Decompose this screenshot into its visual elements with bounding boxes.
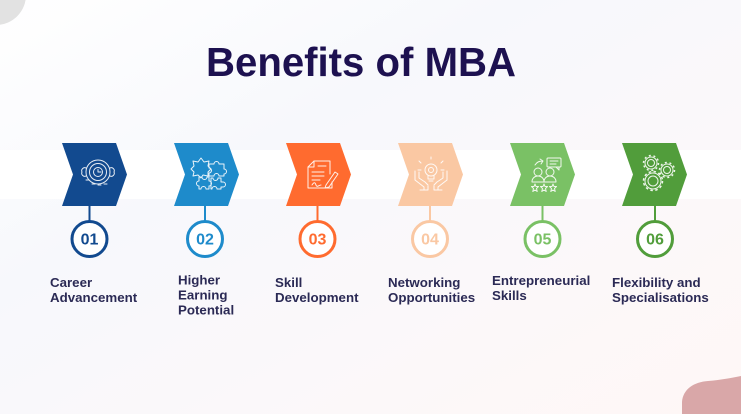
step 5: Entrepreneurial Skills [492,143,590,303]
number badge 06 [638,222,672,256]
number badge 04: 04 [421,232,439,248]
connector 4 [429,206,431,222]
label: Flexibility and Specialisations: Specialisations [612,290,709,305]
icon: headset with clock [82,160,114,185]
chevron 2 [174,143,239,206]
connector 3 [316,206,318,222]
label: Career Advancement: Advancement [50,290,138,305]
label: Career Advancement: Career [50,275,92,290]
label: Entrepreneurial Skills: Skills [492,288,527,303]
decorative corner shape: bottom right [682,376,741,414]
icon: three gears [644,156,674,190]
icon: document and pencil [308,161,338,188]
step 6: Flexibility and Specialisations [612,143,709,305]
step 4: Networking Opportunities [388,143,475,305]
step 1: Career Advancement [50,143,138,305]
connector 6 [654,206,656,222]
number badge 02 [188,222,222,256]
label: Higher Earning Potential: Potential [178,302,234,318]
icon: hands holding light bulb [415,157,447,190]
label: Skill Development: Skill [275,275,302,290]
connector 2 [204,206,206,222]
chevron 6 [622,143,687,206]
number badge 06: 06 [646,232,664,248]
label: Flexibility and Specialisations: Flexibility and [612,275,701,290]
chevron 5 [510,143,575,206]
number badge 03: 03 [309,232,326,248]
number badge 05: 05 [534,232,552,248]
step 2: Higher Earning Potential [174,143,239,318]
icon: puzzle pieces [191,158,226,189]
connector 5 [542,206,544,222]
step 3: Skill Development [275,143,359,305]
label: Higher Earning Potential: Earning [178,288,228,302]
number badge 01: 01 [81,232,98,248]
icon: people, speech bubble and stars [532,158,561,192]
number badge 02: 02 [196,232,214,248]
chevron 3 [286,143,351,206]
white band [0,150,741,199]
number badge 04 [412,222,448,256]
label: Skill Development: Development [275,290,359,305]
label: Networking Opportunities: Opportunities [388,290,475,305]
label: Networking Opportunities: Networking [388,275,460,290]
number badge 01 [72,222,107,256]
chevron 1 [62,143,127,206]
number badge 03 [300,222,335,256]
title: Benefits of MBA [206,39,516,85]
label: Higher Earning Potential: Higher [178,272,220,288]
decorative corner shape: top left [0,0,26,25]
number badge 05 [525,222,560,256]
label: Entrepreneurial Skills: Entrepreneurial [492,273,590,288]
connector 1 [88,206,90,222]
chevron 4 [398,143,463,206]
